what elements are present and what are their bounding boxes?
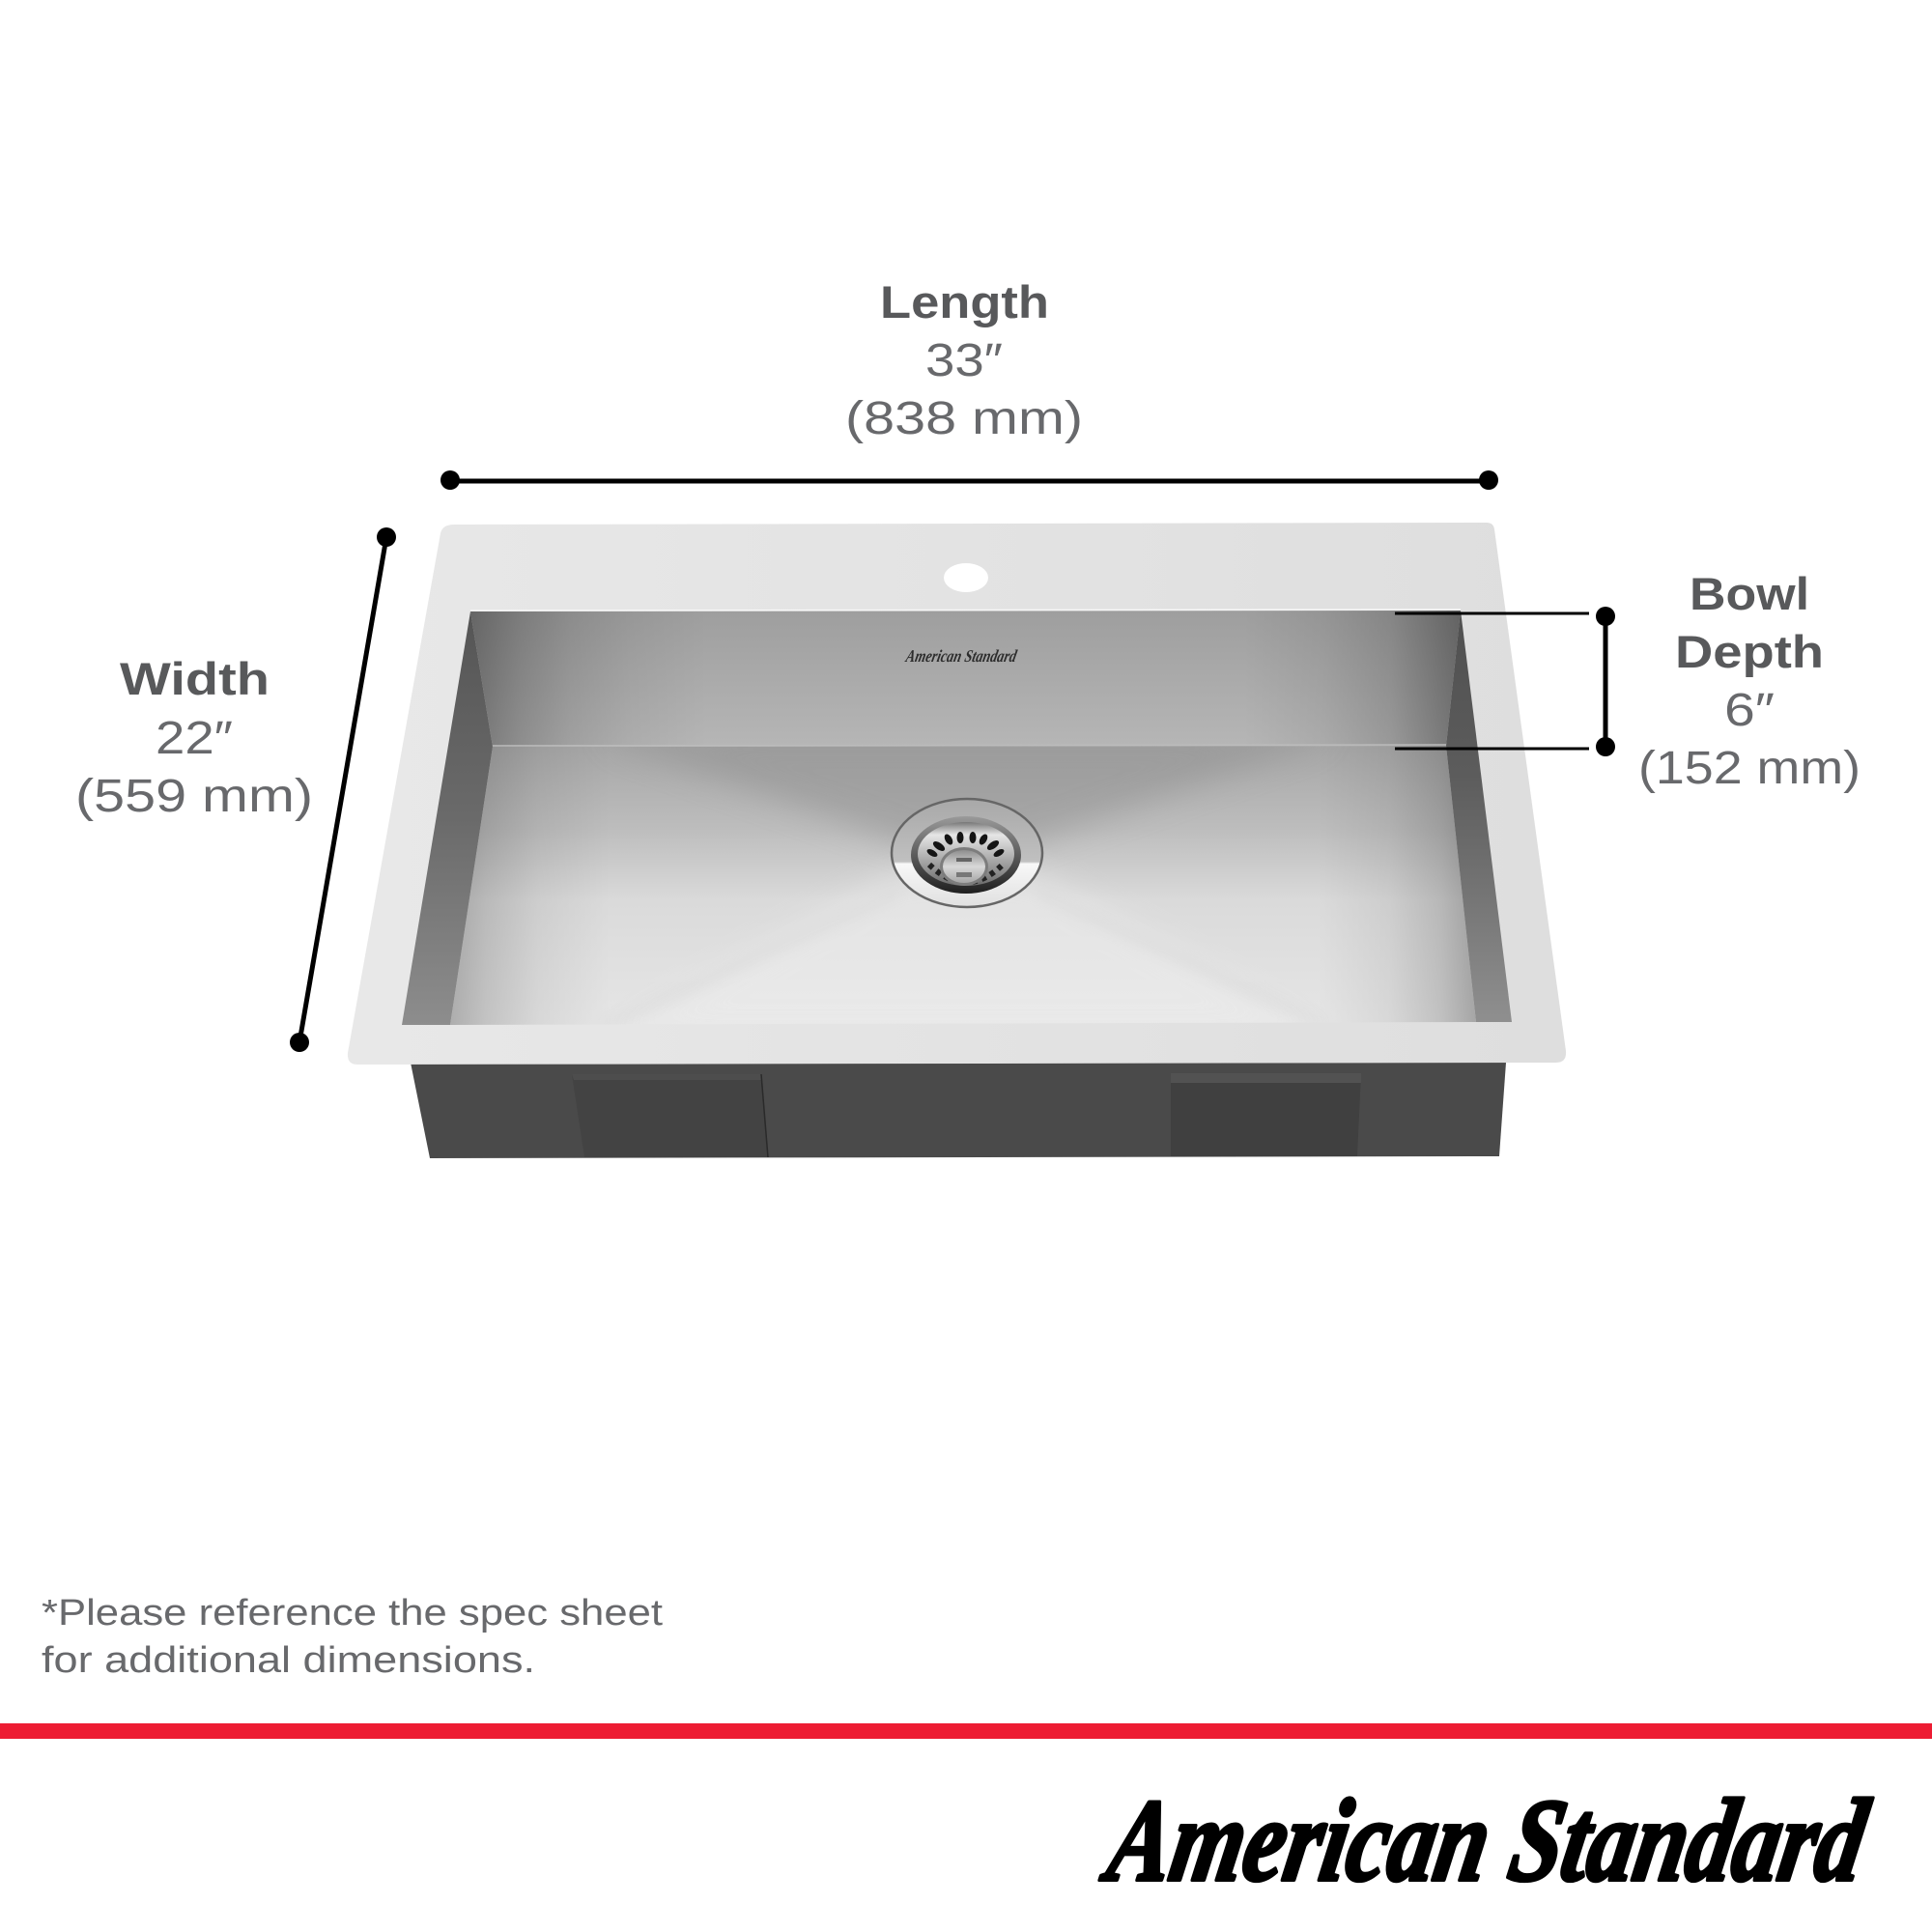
left side wall [402,611,493,1025]
length label: (838 mm) [845,393,1083,444]
strainer slots [925,832,1006,859]
dimension: length [440,276,1498,490]
footnote [42,1593,664,1681]
width label: (559 mm) [75,771,313,822]
width arrow line [290,527,396,1052]
strainer teeth [929,865,1003,883]
bowl depth label: Depth [1675,626,1824,677]
drain strainer [892,799,1042,907]
sink bowl [402,610,1512,1034]
bowl depth bracket [1395,607,1615,756]
red divider bar [0,1723,1932,1739]
footnote: for additional dimensions. [42,1640,535,1681]
width label [75,653,313,822]
sink underbody [411,1063,1506,1158]
length label: Length [880,276,1049,327]
bowl depth label [1638,568,1861,794]
dimension: bowl depth [1395,568,1861,794]
width label: 22″ [156,713,233,764]
left mounting bracket [572,1074,768,1157]
bowl depth label: 6″ [1724,685,1775,736]
footnote: *Please reference the spec sheet [42,1593,664,1634]
right mounting bracket [1171,1073,1361,1156]
sink product image [348,523,1566,1158]
length arrow line [440,470,1498,490]
bowl depth label: Bowl [1690,568,1809,619]
bowl crease and highlights [470,610,1461,746]
strainer centre cap [940,847,988,886]
sink deck plate [348,523,1566,1065]
dimension: width [75,527,396,1052]
back wall [470,611,1461,747]
length label [845,276,1083,444]
length label: 33″ [925,335,1003,386]
width label: Width [120,653,270,704]
bowl floor [444,734,1483,1034]
faucet hole [944,563,988,592]
right side wall [1446,611,1512,1022]
bowl depth label: (152 mm) [1638,743,1861,794]
engraved logo: American Standard [903,646,1019,666]
